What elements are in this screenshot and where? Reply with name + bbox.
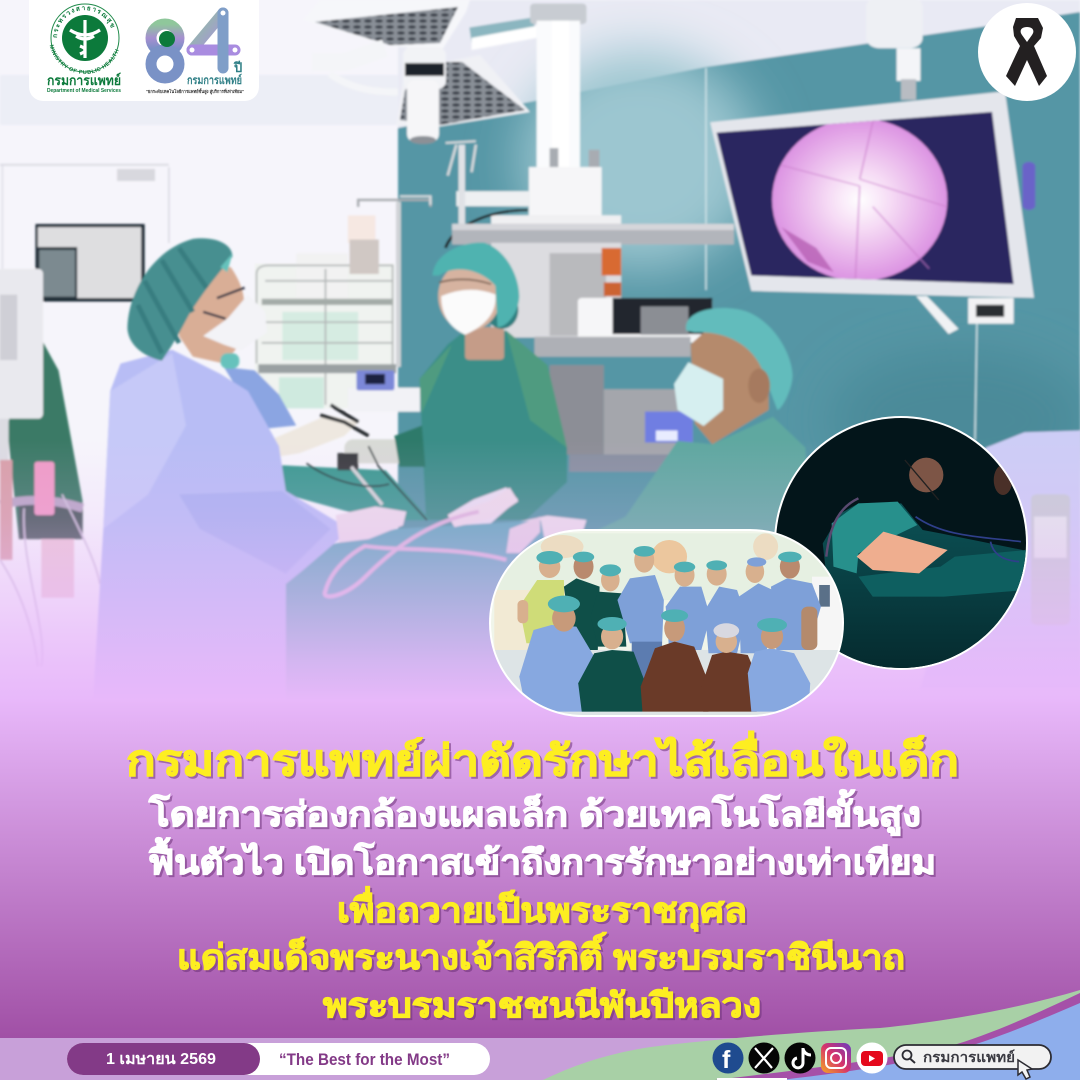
purple gradient panel xyxy=(0,700,1080,1040)
photo fade overlay xyxy=(0,440,1080,702)
date and slogan pill: 1 เมษายน 2569 xyxy=(106,1051,216,1068)
surgical lamp xyxy=(303,0,530,144)
inset photo: team group xyxy=(489,529,848,717)
subtitle line 1: โดยการส่องกล้องแผลเล็ก ด้วยเทคโนโลยีขั้นสูง xyxy=(148,789,921,836)
door and window xyxy=(0,164,431,667)
search box: กรมการแพทย์ xyxy=(923,1049,1015,1065)
operating table, left surgeon xyxy=(93,238,579,701)
icon: black mourning ribbon xyxy=(978,3,1076,101)
subtitle line 2: ฟื้นตัวไว เปิดโอกาสเข้าถึงการรักษาอย่างเท่าเทียม xyxy=(148,837,936,882)
icon: YouTube xyxy=(856,1042,888,1074)
icon: TikTok xyxy=(784,1042,816,1074)
logo: Ministry of Public Health seal: MINISTRY OF PUBLIC HEALTH xyxy=(50,44,119,74)
date and slogan pill xyxy=(67,1043,490,1075)
equipment cart xyxy=(255,264,394,408)
dedication line 1: เพื่อถวายเป็นพระราชกุศล xyxy=(337,886,747,932)
front row xyxy=(519,625,594,712)
right surgeon xyxy=(582,417,808,537)
logo: 84 years: "ยกระดับเทคโนโลยีการแพทย์ชั้นสูง สู่บริการที่เท่าเทียม" xyxy=(146,87,244,95)
middle surgeon xyxy=(420,331,567,520)
logo panel xyxy=(29,0,259,101)
logo: 84 years: กรมการแพทย์ xyxy=(187,73,242,87)
logo: Ministry of Public Health seal: กระทรวงสาธารณสุข xyxy=(53,6,114,38)
icon: Instagram xyxy=(821,1043,851,1073)
logo: 84 years: ปี xyxy=(233,60,242,75)
teal wall xyxy=(398,12,1080,560)
back row xyxy=(519,580,566,643)
logo: Ministry of Public Health seal: กรมการแพทย์ xyxy=(47,72,121,88)
inset photo: surgical field xyxy=(770,410,1030,680)
headline text xyxy=(126,731,959,1025)
icon: facebook: f xyxy=(722,1046,731,1074)
logo: Ministry of Public Health seal xyxy=(47,4,121,94)
search box xyxy=(894,1045,1051,1079)
icon: facebook xyxy=(712,1042,744,1074)
dedication line 3: พระบรมราชชนนีพันปีหลวง xyxy=(323,987,761,1025)
title line: กรมการแพทย์ผ่าตัดรักษาไส้เลื่อนในเด็ก xyxy=(126,731,959,784)
date and slogan pill: “The Best for the Most” xyxy=(279,1051,450,1069)
footer bar xyxy=(0,990,1080,1080)
logo: Ministry of Public Health seal: Department of Medical Services xyxy=(47,88,121,94)
ceiling xyxy=(0,75,400,125)
logo: 84 years xyxy=(146,10,244,95)
ceiling equipment, tower, monitor xyxy=(400,0,1080,689)
drape and bottle right xyxy=(920,431,1080,689)
icon: X xyxy=(748,1042,780,1074)
photo: operating room background xyxy=(0,0,1080,688)
icon: cursor xyxy=(1018,1060,1032,1079)
device panel xyxy=(0,269,43,419)
dedication line 2: แด่สมเด็จพระนางเจ้าสิริกิติ์ พระบรมราชินีนาถ xyxy=(177,932,905,977)
far left staff xyxy=(7,336,83,539)
